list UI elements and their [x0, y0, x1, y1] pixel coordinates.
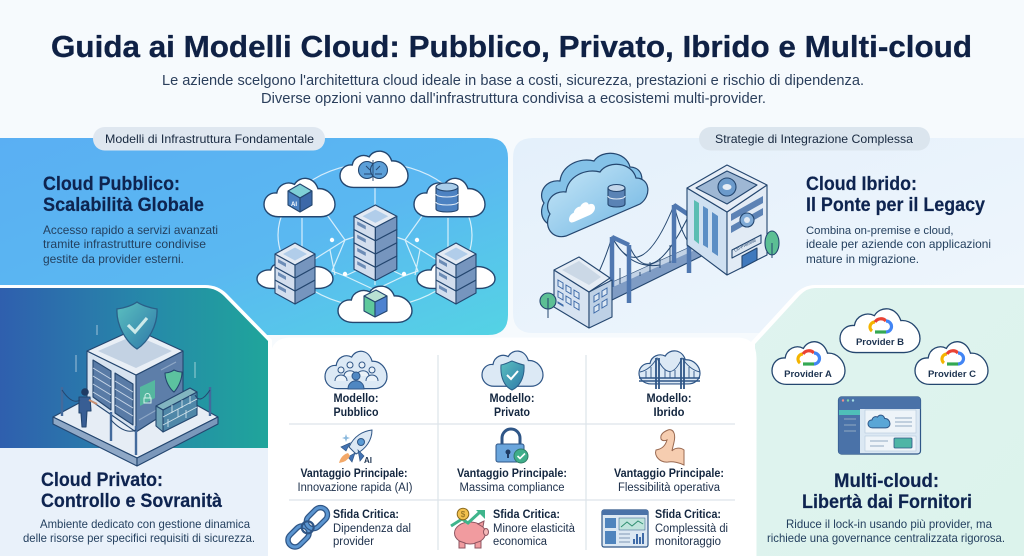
section pill: right: Strategie di Integrazione Complessa [715, 132, 913, 146]
heading [41, 469, 222, 512]
cloud: left server [257, 243, 333, 304]
cloud: right server [417, 243, 495, 304]
description: Riduce il lock-in usando più provider, ma [786, 517, 992, 531]
tree right [765, 231, 779, 258]
label: sfida privato [493, 509, 576, 548]
icon: monitoring dashboard [602, 510, 648, 547]
section pill: left: Modelli di Infrastruttura Fondamentale [105, 132, 314, 146]
subtitle: Le aziende scelgono l'architettura cloud ideale in base a costi, sicurezza, prestazioni e rischio di dipendenza. [162, 73, 864, 89]
provider A cloud [772, 342, 845, 384]
icon: piggy bank: $ [461, 510, 466, 519]
label: sfida ibrido: Sfida Critica: [655, 509, 721, 521]
on-premise tower: On-Premise [733, 237, 757, 253]
label: modello ibrido: Ibrido [654, 407, 684, 419]
description: Combina on-premise e cloud, [806, 225, 954, 237]
icon: chain [285, 505, 330, 550]
description [806, 225, 991, 266]
heading: Cloud Pubblico: [43, 173, 180, 195]
subtitle: Diverse opzioni vanno dall'infrastruttura condivisa a ecosistemi multi-provider. [261, 91, 766, 107]
label: modello pubblico: Modello: [334, 393, 378, 405]
label: vantaggio privato [457, 468, 567, 494]
label: vantaggio pubblico: Innovazione rapida (AI) [298, 482, 413, 494]
icon: hybrid bridge cloud [639, 351, 700, 389]
brick wall [156, 388, 197, 432]
heading [806, 173, 985, 216]
security shield [117, 302, 157, 349]
3D cloud [542, 153, 648, 237]
label: vantaggio privato: Massima compliance [460, 482, 564, 494]
label: vantaggio ibrido: Vantaggio Principale: [614, 468, 724, 480]
heading [43, 173, 204, 216]
icon: padlock [496, 429, 528, 463]
label: modello pubblico: Pubblico [334, 407, 378, 419]
label: sfida ibrido: monitoraggio [655, 536, 721, 548]
panel: cloud pubblico [0, 138, 508, 335]
cloud: AI cube: AI [291, 202, 297, 208]
description: delle risorse per specifici requisiti di sicurezza. [23, 531, 255, 545]
provider A cloud: Provider A [784, 369, 832, 380]
bridge [596, 205, 722, 303]
label: sfida ibrido: Complessità di [655, 523, 728, 535]
label: sfida pubblico [333, 509, 411, 548]
heading: Il Ponte per il Legacy [806, 194, 985, 216]
title: Guida ai Modelli Cloud: Pubblico, Privato, Ibrido e Multi-cloud [51, 30, 972, 64]
section pill: left [93, 127, 325, 150]
label: vantaggio ibrido [614, 468, 724, 494]
icon: flexed arm [656, 430, 684, 465]
heading: Multi-cloud: [834, 470, 939, 492]
on-premise tower [687, 165, 767, 275]
panel: multi-cloud [751, 285, 1024, 556]
label: modello privato: Privato [494, 407, 530, 419]
glow lines [76, 325, 195, 378]
description: tramite infrastrutture condivise [43, 237, 206, 251]
provider B cloud: Provider B [856, 337, 904, 348]
label: sfida pubblico: provider [333, 536, 374, 548]
cloud: database [414, 178, 485, 217]
icon: public users cloud [325, 351, 387, 389]
shield check [128, 318, 147, 332]
label: sfida privato: Sfida Critica: [493, 509, 560, 521]
label: vantaggio ibrido: Flessibilità operativa [618, 482, 721, 494]
label: vantaggio pubblico: Vantaggio Principale: [300, 468, 408, 480]
description: mature in migrazione. [806, 252, 919, 266]
cloud: brain [340, 151, 408, 187]
label: modello privato: Modello: [490, 393, 534, 405]
label: sfida ibrido [655, 509, 728, 548]
cloud: package [338, 286, 412, 322]
person [79, 388, 97, 427]
provider C cloud: Provider C [928, 369, 976, 380]
panel: comparison table [272, 339, 755, 556]
heading: Cloud Ibrido: [806, 173, 917, 195]
label: vantaggio pubblico [298, 468, 413, 494]
cloud: AI cube [264, 178, 335, 217]
heading: Controllo e Sovranità [41, 490, 222, 512]
provider B cloud [840, 309, 920, 353]
heading [802, 470, 972, 513]
label: modello ibrido: Modello: [646, 393, 692, 405]
panel: cloud privato [0, 285, 272, 556]
description: richiede una governance centralizzata rigorosa. [767, 531, 1005, 545]
label: modello ibrido [646, 393, 692, 419]
description: Accesso rapido a servizi avanzati [43, 223, 218, 237]
table grid [289, 355, 735, 550]
label: modello pubblico [334, 393, 378, 419]
network nodes [330, 238, 419, 276]
panel: cloud ibrido [513, 138, 1024, 333]
central server [354, 205, 397, 280]
heading: Libertà dai Fornitori [802, 491, 972, 513]
description [43, 223, 218, 266]
datacenter illustration [53, 329, 218, 466]
rope posts [62, 387, 210, 455]
icon: private shield cloud [482, 351, 543, 390]
provider C cloud [915, 342, 988, 384]
description [767, 517, 1005, 545]
heading: Cloud Privato: [41, 469, 163, 491]
tree left [540, 293, 556, 318]
subtitle [162, 73, 864, 107]
icon: piggy bank [451, 508, 488, 548]
label: modello privato [490, 393, 534, 419]
label: sfida privato: economica [493, 536, 548, 548]
description: gestite da provider esterni. [43, 252, 184, 266]
icon: rocket AI: AI [364, 456, 372, 465]
label: vantaggio privato: Vantaggio Principale: [457, 468, 567, 480]
icon: rocket AI [339, 430, 372, 465]
heading: Scalabilità Globale [43, 194, 204, 216]
label: sfida privato: Minore elasticità [493, 523, 576, 535]
description: Ambiente dedicato con gestione dinamica [40, 517, 250, 531]
description [23, 517, 255, 545]
label: sfida pubblico: Sfida Critica: [333, 509, 399, 521]
label: sfida pubblico: Dipendenza dal [333, 523, 411, 535]
section pill: right [699, 127, 930, 150]
governance console window [838, 397, 920, 454]
network lines [278, 163, 472, 307]
description: ideale per aziende con applicazioni [806, 237, 991, 251]
legacy building [554, 257, 612, 328]
